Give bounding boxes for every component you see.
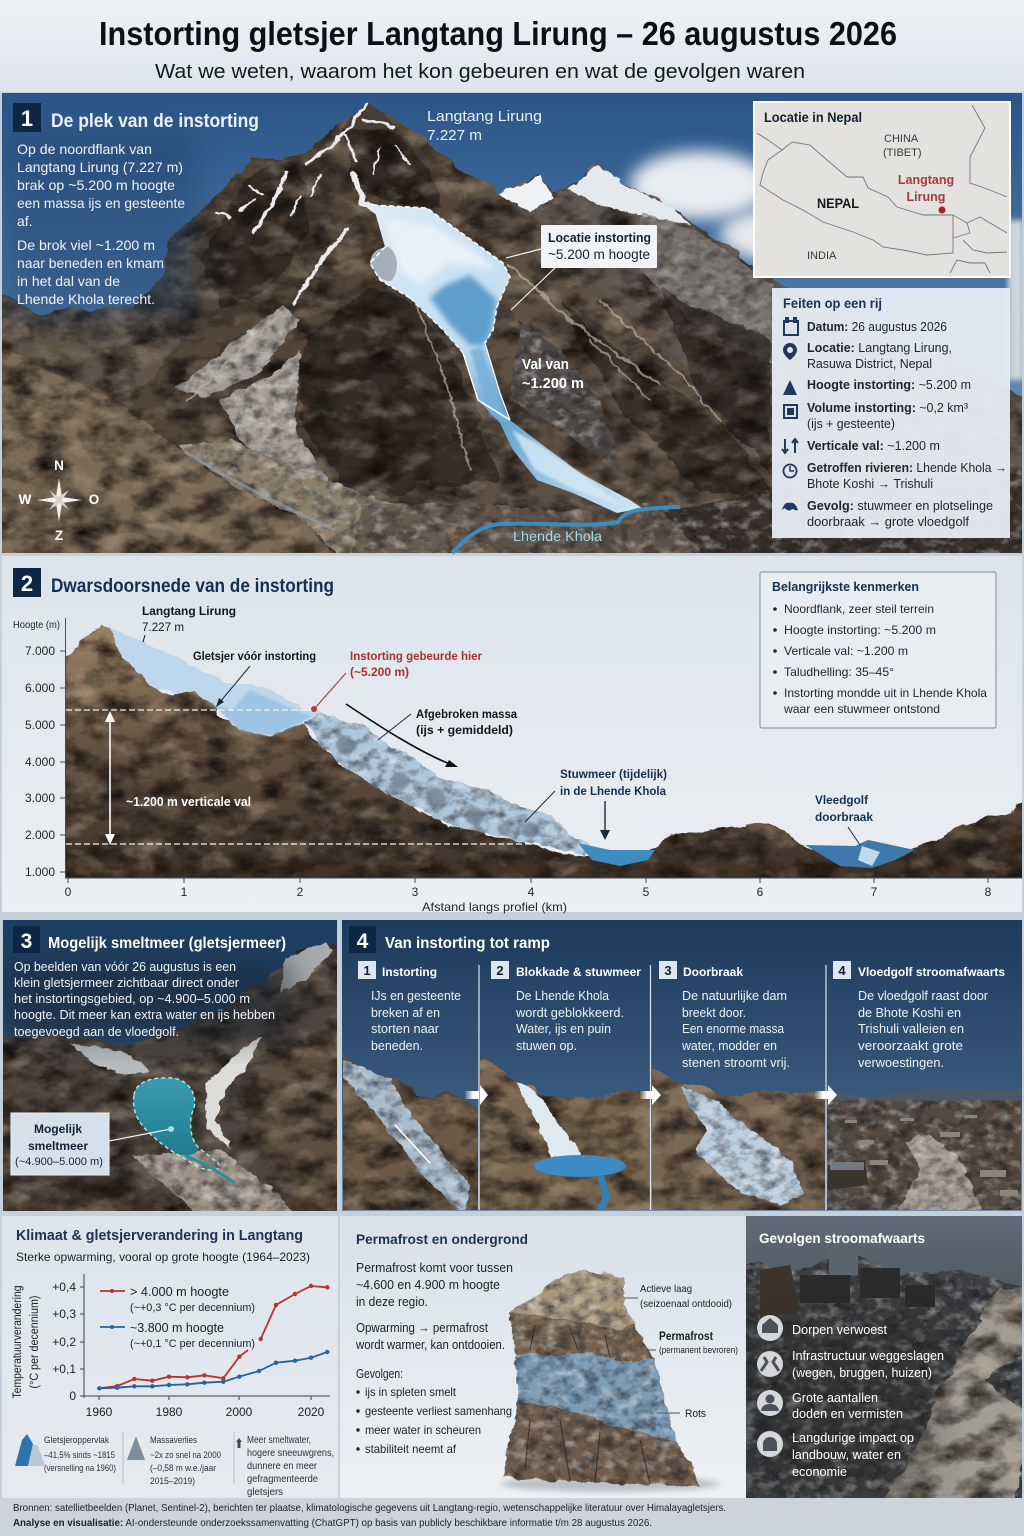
badge 2: 2 <box>21 571 33 596</box>
label: vloedgolf: doorbraak <box>815 810 873 824</box>
description: het instortingsgebied, op ~4.900–5.000 m <box>14 992 250 1006</box>
step 1 text: 1 <box>363 963 371 978</box>
step 1 text: beneden. <box>371 1039 423 1053</box>
stat: meer smeltwater <box>236 1435 334 1498</box>
step 4 text: verwoestingen. <box>858 1056 944 1070</box>
step 2 text: Blokkade & stuwmeer <box>516 965 641 979</box>
step 3 text: stenen stroomt vrij. <box>682 1056 790 1070</box>
step 1 text: IJs en gesteente <box>371 989 461 1003</box>
fact rows: doorbraak → grote vloedgolf <box>807 515 970 529</box>
step 4 text: veroorzaakt grote <box>858 1039 963 1053</box>
stat: massaverlies: 2015–2019) <box>150 1476 195 1487</box>
description: hoogte. Dit meer kan extra water en ijs hebben <box>14 1008 275 1022</box>
peak label <box>427 109 542 144</box>
line chart: 1980 <box>156 1405 183 1419</box>
panel: gevolgen stroomafwaarts <box>735 1216 1024 1510</box>
line chart: 2020 <box>298 1405 325 1419</box>
label: instorting gebeurde hier: (~5.200 m) <box>350 665 409 679</box>
compass: N <box>54 458 64 473</box>
legend: (~+0,3 °C per decennium) <box>130 1302 255 1314</box>
label: vloedgolf: Vleedgolf <box>815 793 869 807</box>
footer: sources: Bronnen: satellietbeelden (Planet, Sentinel-2), berichten ter plaatse, klimatologische gegevens uit Langtang-regio, wetenschappelijke literatuur over Himalayagletsjers. <box>13 1502 726 1514</box>
heading: Permafrost en ondergrond <box>356 1231 528 1247</box>
mountain photo illustration <box>0 93 1024 570</box>
callout: locatie instorting <box>506 225 657 310</box>
label: afgebroken massa: Afgebroken massa <box>416 707 517 721</box>
label: Lhende Khola: Lhende Khola <box>513 528 602 544</box>
heading: Dwarsdoorsnede van de instorting <box>51 576 334 597</box>
stat: gletsjeroppervlak: –41,5% sinds ~1815 <box>44 1450 115 1461</box>
step 2 text <box>491 961 641 1053</box>
collapsed mass <box>306 713 590 855</box>
box: belangrijkste kenmerken: waar een stuwmeer ontstond <box>783 702 940 716</box>
stat: massaverlies <box>127 1435 221 1487</box>
label: peak: Langtang Lirung <box>142 604 236 618</box>
step 4 text <box>833 961 1005 1070</box>
fact rows: Datum: 26 augustus 2026 <box>807 320 947 334</box>
map: locatie in Nepal: Langtang <box>898 173 954 187</box>
panel 4: van instorting tot ramp <box>330 920 1024 1225</box>
step 4 text: Trishuli valleien en <box>858 1022 964 1036</box>
y axis: 5.000 <box>25 718 55 732</box>
step 1 text: storten naar <box>371 1022 439 1036</box>
line chart: 1960 <box>86 1405 113 1419</box>
label: val van: ~1.200 m <box>522 376 584 392</box>
lake photo illustration <box>0 920 350 1225</box>
line chart <box>12 1274 330 1419</box>
consequences list: stabiliteit neemt af <box>365 1442 457 1456</box>
peak label: Langtang Lirung <box>427 109 542 125</box>
compass: Z <box>55 528 63 543</box>
description: toegevoegd aan de vloedgolf. <box>14 1025 179 1039</box>
intro text: Langtang Lirung (7.227 m) <box>17 159 183 175</box>
impact: dorpen verwoest <box>757 1315 888 1341</box>
stat: massaverlies: (–0,58 m w.e./jaar <box>150 1463 216 1474</box>
stat: meer smeltwater: dunnere en meer <box>247 1461 318 1472</box>
impact: doden en vermisten <box>757 1390 903 1421</box>
footer: sources <box>0 1498 1024 1536</box>
consequences list: ijs in spleten smelt <box>365 1385 457 1399</box>
impact: infrastructuur: (wegen, bruggen, huizen) <box>792 1366 932 1380</box>
impact: langdurige impact: economie <box>792 1465 847 1479</box>
consequences list: gesteente verliest samenhang <box>365 1404 512 1418</box>
step 1 text <box>358 961 461 1053</box>
label: actieve laag: (seizoenaal ontdooid) <box>640 1299 732 1310</box>
vertical drop arrow: ~1.200 m verticale val <box>126 795 251 809</box>
impact: langdurige impact <box>757 1431 914 1479</box>
box: belangrijkste kenmerken: Verticale val: ~1.200 m <box>784 644 908 658</box>
stat: massaverlies: ~2x zo snel na 2000 <box>150 1450 221 1461</box>
compass: O <box>89 492 99 507</box>
intro text: een massa ijs en gesteente <box>17 195 185 211</box>
label: rots <box>657 1408 706 1420</box>
step 3 text: De natuurlijke dam <box>682 989 787 1003</box>
stat: gletsjeroppervlak: (versnelling na 1960) <box>44 1463 116 1474</box>
fact rows: Hoogte instorting: ~5.200 m <box>807 378 971 392</box>
map: locatie in Nepal: NEPAL <box>817 195 859 211</box>
badge 3: 3 <box>21 930 32 953</box>
icons <box>782 318 798 511</box>
impact: infrastructuur: Infrastructuur weggeslagen <box>792 1349 944 1363</box>
legend <box>100 1285 255 1350</box>
description <box>14 960 275 1039</box>
subheading: Sterke opwarming, vooral op grote hoogte (1964–2023) <box>16 1250 310 1264</box>
impact: doden en vermisten: Grote aantallen <box>792 1391 878 1405</box>
label: permafrost <box>645 1329 738 1356</box>
stat: massaverlies: Massaverlies <box>150 1435 197 1446</box>
label: permafrost: (permanent bevroren) <box>659 1345 738 1356</box>
glacier collapse zone <box>370 205 642 513</box>
step image 1 <box>343 1056 478 1210</box>
panel: klimaat en gletsjerverandering <box>2 1216 338 1498</box>
vertical drop arrow <box>105 711 251 845</box>
stat: meer smeltwater: hogere sneeuwgrens, <box>247 1448 334 1459</box>
cross section illustration <box>50 625 1024 895</box>
facts box: feiten op een rij: Feiten op een rij <box>783 295 882 311</box>
legend: > 4.000 m hoogte <box>130 1285 229 1299</box>
step 4 text: 4 <box>838 963 846 978</box>
line chart: Temperatuurverandering <box>12 1286 24 1398</box>
panel 3: mogelijk smeltmeer <box>0 920 350 1225</box>
step image 2 <box>480 1057 650 1210</box>
y axis <box>13 618 66 879</box>
box: belangrijkste kenmerken: Taludhelling: 35–45° <box>784 665 894 679</box>
badge 1: 1 <box>21 106 33 131</box>
fact rows: Volume instorting: ~0,2 km³ <box>807 401 968 415</box>
box: belangrijkste kenmerken: Belangrijkste kenmerken <box>772 580 919 594</box>
step 3 text: Een enorme massa <box>682 1022 784 1036</box>
consequences list: meer water in scheuren <box>365 1423 481 1437</box>
step 2 text: wordt geblokkeerd. <box>515 1006 624 1020</box>
step 1 text: breken af en <box>371 1006 440 1020</box>
stat: meer smeltwater: gletsjers <box>247 1487 283 1498</box>
arrow: direction of fall <box>346 704 458 767</box>
river Lhende Khola <box>452 507 680 553</box>
line chart: 0 <box>69 1389 76 1403</box>
intro text: af. <box>17 213 33 229</box>
label: instorting gebeurde hier: Instorting gebeurde hier <box>350 649 482 663</box>
map: locatie in Nepal: (TIBET) <box>883 147 922 159</box>
step dividers <box>479 965 826 1210</box>
step 4 text: Vloedgolf stroomafwaarts <box>858 965 1005 979</box>
step 3 text: Doorbraak <box>683 965 743 979</box>
y axis: 7.000 <box>25 644 55 658</box>
y axis: 3.000 <box>25 791 55 805</box>
heading: Klimaat & gletsjerverandering in Langtang <box>16 1228 303 1244</box>
body text: Gevolgen: <box>356 1367 403 1381</box>
label: peak: 7.227 m <box>142 620 184 634</box>
label: val van <box>522 357 584 392</box>
label: gletsjer voor instorting: Gletsjer vóór instorting <box>193 649 316 663</box>
label: stuwmeer <box>525 767 667 840</box>
fact rows: Rasuwa District, Nepal <box>807 357 932 371</box>
badge 2 <box>13 568 41 597</box>
badge 4: 4 <box>357 930 369 953</box>
step 3 text: water, modder en <box>681 1039 777 1053</box>
fact rows: Getroffen rivieren: Lhende Khola → <box>807 461 1007 475</box>
heading: De plek van de instorting <box>51 111 259 132</box>
badge 3 <box>13 926 40 953</box>
label: instorting gebeurde hier <box>311 649 482 712</box>
line chart: +0,1 <box>52 1362 76 1376</box>
x axis: 2 <box>297 885 304 899</box>
map: locatie in Nepal: INDIA <box>807 250 837 262</box>
step 3 text: 3 <box>664 963 672 978</box>
label: permafrost: Permafrost <box>659 1329 713 1343</box>
label: peak <box>142 604 236 642</box>
label: vloedgolf <box>815 793 873 845</box>
series above 4000 m <box>99 1284 329 1388</box>
consequences list <box>356 1385 512 1456</box>
heading: Van instorting tot ramp <box>385 935 550 952</box>
dammed lake <box>578 843 655 866</box>
fact rows: Verticale val: ~1.200 m <box>807 439 940 453</box>
x axis: 1 <box>181 885 188 899</box>
impact: doden en vermisten: doden en vermisten <box>792 1407 903 1421</box>
body text: Opwarming → permafrost <box>356 1321 488 1335</box>
x axis: 8 <box>985 885 992 899</box>
x axis <box>65 878 1022 914</box>
intro text: naar beneden en kmam <box>17 255 164 271</box>
header <box>0 0 1024 92</box>
y axis: 1.000 <box>25 865 55 879</box>
description: Op beelden van vóór 26 augustus is een <box>14 960 236 974</box>
lake <box>133 1078 235 1183</box>
arrow between steps 2-3 <box>640 1085 661 1105</box>
body text: Permafrost komt voor tussen <box>356 1261 513 1275</box>
impact: infrastructuur <box>757 1349 944 1380</box>
label: gletsjer voor instorting <box>193 649 316 707</box>
line chart: +0,2 <box>52 1335 76 1349</box>
body text <box>355 1261 513 1381</box>
label: afgebroken massa <box>378 707 517 740</box>
arrow between steps 3-4 <box>815 1085 837 1105</box>
panel: permafrost en ondergrond <box>340 1216 746 1498</box>
subtitle: Wat we weten, waarom het kon gebeuren en wat de gevolgen waren <box>155 61 805 83</box>
label: val van: Val van <box>522 357 569 373</box>
x axis: 7 <box>871 885 878 899</box>
map: locatie in Nepal: CHINA <box>884 133 919 145</box>
line chart: 2000 <box>226 1405 253 1419</box>
label: stuwmeer: Stuwmeer (tijdelijk) <box>560 767 667 781</box>
step 2 text: 2 <box>496 963 504 978</box>
intro text: in het dal van de <box>17 273 120 289</box>
x axis: 3 <box>412 885 419 899</box>
intro text <box>17 141 185 307</box>
dashed level lines <box>66 709 315 711</box>
impact: langdurige impact: landbouw, water en <box>792 1448 901 1462</box>
callout: mogelijk smeltmeer: smeltmeer <box>28 1139 88 1153</box>
line chart: +0,4 <box>52 1280 76 1294</box>
intro text: brak op ~5.200 m hoogte <box>17 177 175 193</box>
body text: in deze regio. <box>356 1295 428 1309</box>
step 3 text <box>659 961 790 1070</box>
step 3 text: breekt door. <box>682 1006 746 1020</box>
step 1 text: Instorting <box>382 965 437 979</box>
badge 1 <box>13 103 41 132</box>
rock block diagram <box>500 1270 720 1492</box>
step 2 text: De Lhende Khola <box>516 989 609 1003</box>
intro text: Lhende Khola terecht. <box>17 291 155 307</box>
step image 4 <box>827 1088 1021 1210</box>
stat: meer smeltwater: Meer smeltwater, <box>247 1435 311 1446</box>
location dot <box>938 206 946 214</box>
map: locatie in Nepal <box>754 102 1010 277</box>
description: klein gletsjermeer zichtbaar direct onder <box>14 976 239 990</box>
intro text: Op de noordflank van <box>17 141 152 157</box>
step image 3 <box>652 1068 825 1210</box>
x axis: Afstand langs profiel (km) <box>422 900 567 914</box>
body text: ~4.600 en 4.900 m hoogte <box>356 1278 500 1292</box>
x axis: 0 <box>65 885 72 899</box>
fact rows: (ijs + gesteente) <box>807 417 895 431</box>
footer: sources: Analyse en visualisatie: AI-ondersteunde onderzoekssamenvatting (ChatGPT) op basis van publicly beschikbare informatie t/m 28 augustus 2026. <box>13 1517 652 1529</box>
map: locatie in Nepal: Locatie in Nepal <box>764 109 862 125</box>
impact: langdurige impact: Langdurige impact op <box>792 1431 914 1445</box>
fact rows: Gevolg: stuwmeer en plotselinge <box>807 499 993 513</box>
line chart: (°C per decennium) <box>29 1295 41 1388</box>
stat: gletsjeroppervlak <box>15 1434 116 1474</box>
label: afgebroken massa: (ijs + gemiddeld) <box>416 723 513 737</box>
callout: locatie instorting: Locatie instorting <box>548 230 651 245</box>
stat: meer smeltwater: gefragmenteerde <box>247 1474 319 1485</box>
step 4 text: de Bhote Koshi en <box>858 1006 961 1020</box>
fact rows: Locatie: Langtang Lirung, <box>807 341 952 355</box>
y axis: 4.000 <box>25 755 55 769</box>
flood photo illustration <box>735 1216 1024 1510</box>
callout: locatie instorting: ~5.200 m hoogte <box>548 247 650 262</box>
label: stuwmeer: in de Lhende Khola <box>560 784 666 798</box>
callout: mogelijk smeltmeer <box>11 1113 174 1175</box>
series 3800 m <box>97 1350 329 1391</box>
body text: wordt warmer, kan ontdooien. <box>355 1338 505 1352</box>
heading: Gevolgen stroomafwaarts <box>759 1230 925 1246</box>
y axis: 2.000 <box>25 828 55 842</box>
title: Instorting gletsjer Langtang Lirung – 26 augustus 2026 <box>99 15 897 52</box>
badge 4 <box>349 926 376 953</box>
x axis: 5 <box>643 885 650 899</box>
compass <box>19 458 99 543</box>
compass: W <box>19 492 32 507</box>
callout: mogelijk smeltmeer: Mogelijk <box>34 1122 82 1136</box>
y axis: Hoogte (m) <box>13 620 60 631</box>
box: belangrijkste kenmerken: Noordflank, zeer steil terrein <box>784 602 934 616</box>
legend: ~3.800 m hoogte <box>130 1321 224 1335</box>
map: locatie in Nepal: Lirung <box>907 190 945 204</box>
step 2 text: Water, ijs en puin <box>516 1022 611 1036</box>
glacier before collapse <box>110 628 322 736</box>
peak label: 7.227 m <box>427 128 482 144</box>
y axis: 6.000 <box>25 681 55 695</box>
box: belangrijkste kenmerken: Hoogte instorting: ~5.200 m <box>784 623 936 637</box>
impact: dorpen verwoest: Dorpen verwoest <box>792 1323 888 1337</box>
step 2 text: stuwen op. <box>516 1039 577 1053</box>
label: rots: Rots <box>685 1408 706 1420</box>
heading: Mogelijk smeltmeer (gletsjermeer) <box>48 935 286 952</box>
callout: mogelijk smeltmeer: (~4.900–5.000 m) <box>15 1156 103 1168</box>
fact rows <box>807 320 1007 529</box>
stat: gletsjeroppervlak: Gletsjeroppervlak <box>44 1435 109 1446</box>
fact rows: Bhote Koshi → Trishuli <box>807 477 933 491</box>
x axis: 4 <box>528 885 535 899</box>
legend: (~+0,1 °C per decennium) <box>130 1338 255 1350</box>
intro text: De brok viel ~1.200 m <box>17 237 155 253</box>
box: belangrijkste kenmerken: Instorting mondde uit in Lhende Khola <box>784 686 987 700</box>
label: actieve laag <box>624 1283 732 1310</box>
label: actieve laag: Actieve laag <box>640 1283 692 1295</box>
arrow between steps 1-2 <box>465 1085 488 1105</box>
box: belangrijkste kenmerken <box>760 572 996 728</box>
step 4 text: De vloedgolf raast door <box>858 989 988 1003</box>
panel 1: de plek van de instorting <box>0 93 1024 570</box>
flood wave water <box>805 840 915 868</box>
line chart: +0,3 <box>52 1307 76 1321</box>
panel 2: dwarsdoorsnede <box>2 556 1024 914</box>
x axis: 6 <box>757 885 764 899</box>
facts box: feiten op een rij <box>772 288 1010 538</box>
